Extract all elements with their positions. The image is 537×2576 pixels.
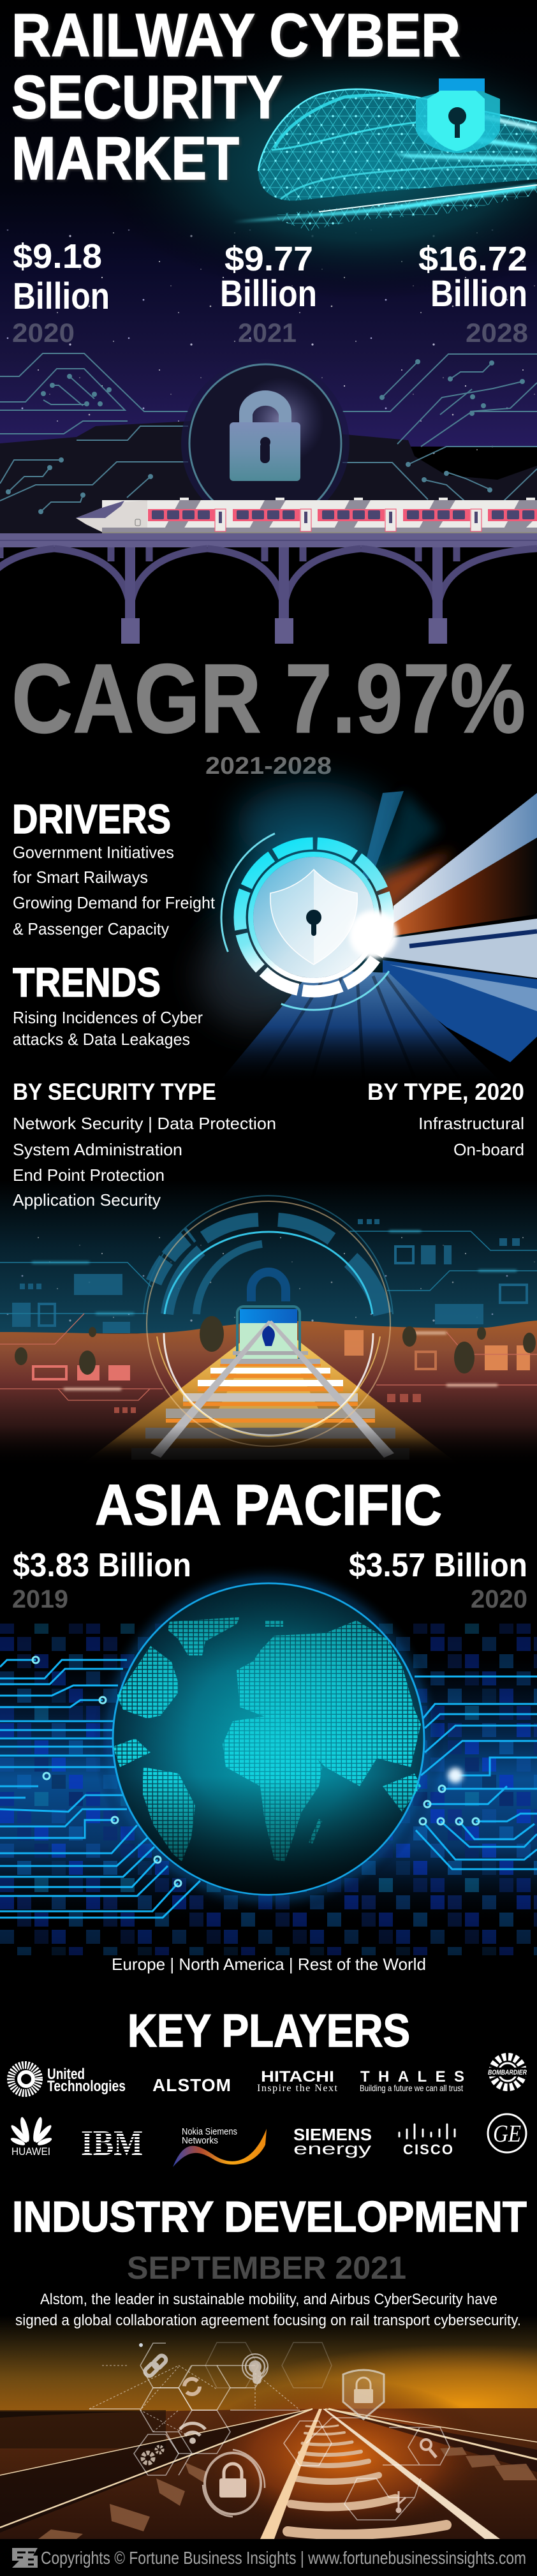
stat: 2021: $9.77 bbox=[224, 240, 313, 278]
logo: Cisco: CISCO bbox=[403, 2142, 453, 2158]
stat: Asia Pacific 2020: $3.57 Billion bbox=[349, 1547, 527, 1584]
stat: 2021: 2021 bbox=[238, 318, 297, 348]
icon: touch bbox=[242, 2354, 268, 2384]
logo: Bombardier: BOMBARDIER bbox=[488, 2069, 527, 2076]
logo: Hitachi: HITACHI bbox=[261, 2068, 334, 2085]
logo: IBM: IBM bbox=[81, 2124, 143, 2163]
icon: gears bbox=[143, 2446, 163, 2463]
logo: United Technologies bbox=[11, 2065, 126, 2095]
panel: by type 2020 bbox=[367, 1079, 524, 1159]
logo: Thales: Building a future we can all trust bbox=[360, 2083, 463, 2093]
icon: wifi bbox=[180, 2424, 205, 2444]
heading: drivers: DRIVERS bbox=[12, 796, 171, 842]
stat: 2028 bbox=[418, 240, 528, 348]
image: rail tracks at sunset with security icons bbox=[0, 2316, 537, 2539]
stat: Asia Pacific 2019 bbox=[12, 1547, 191, 1613]
logo: Huawei: HUAWEI bbox=[11, 2145, 50, 2158]
logo: Nokia Siemens Networks bbox=[173, 2126, 267, 2167]
icon: polygon mesh train with lock shield bbox=[233, 78, 537, 231]
text: industry development body: Alstom, the leader in sustainable mobility, and Airbus CyberSecurity have bbox=[40, 2291, 497, 2308]
icon: shield with keyhole bbox=[270, 870, 357, 965]
title: SECURITY bbox=[11, 63, 283, 131]
icon: padlock bbox=[237, 1272, 300, 1363]
icon: lock in rings bbox=[203, 2450, 265, 2517]
stat: Asia Pacific 2020 bbox=[349, 1547, 527, 1613]
text: types bbox=[418, 1114, 524, 1159]
stat: 2021: Billion bbox=[220, 273, 317, 315]
text: trend list bbox=[13, 1008, 203, 1049]
logo: Hitachi bbox=[257, 2068, 338, 2094]
footer bbox=[0, 2539, 537, 2576]
CAGR period: 2021-2028 bbox=[205, 753, 332, 780]
heading: trends: TRENDS bbox=[13, 959, 161, 1005]
map: dotted continents bbox=[113, 1617, 421, 1862]
text: driver list: & Passenger Capacity bbox=[13, 919, 169, 938]
icon: chain link bbox=[143, 2354, 168, 2378]
text: security types: Application Security bbox=[13, 1190, 161, 1210]
text: trend list: attacks & Data Leakages bbox=[13, 1030, 190, 1049]
icon: shield lock bbox=[343, 2370, 384, 2419]
text: driver list: for Smart Railways bbox=[13, 868, 148, 887]
text: other regions: Europe | North America | Rest of the World bbox=[112, 1955, 426, 1974]
icon: sync arrows bbox=[184, 2379, 200, 2394]
logo: Thales bbox=[360, 2068, 464, 2093]
title: RAILWAY CYBER bbox=[11, 1, 460, 70]
heading: Asia Pacific: ASIA PACIFIC bbox=[95, 1474, 442, 1537]
stat: Asia Pacific 2019: $3.83 Billion bbox=[13, 1547, 191, 1584]
text: types: On-board bbox=[453, 1140, 524, 1159]
text: driver list: Growing Demand for Freight bbox=[13, 893, 216, 912]
logo: Siemens Energy bbox=[293, 2125, 372, 2158]
text: security types: End Point Protection bbox=[13, 1166, 165, 1185]
image: globe with circuit lines bbox=[0, 1564, 537, 1955]
text: security types: System Administration bbox=[13, 1140, 182, 1159]
logo: Nokia Siemens Networks: Networks bbox=[182, 2135, 218, 2146]
text: security types: Network Security | Data Protection bbox=[13, 1114, 276, 1133]
logo: Siemens Energy: SIEMENS bbox=[293, 2125, 372, 2144]
panel: drivers bbox=[12, 796, 216, 938]
icon: usb bbox=[397, 2491, 406, 2512]
icon: rings and sleepers bbox=[131, 1201, 409, 1460]
icon: lock shield bbox=[416, 78, 500, 153]
logo: Cisco bbox=[399, 2124, 455, 2158]
heading: by type: BY TYPE, 2020 bbox=[367, 1079, 524, 1105]
panel: trends bbox=[13, 959, 203, 1049]
logo: Siemens Energy: energy bbox=[293, 2139, 371, 2158]
image: railway track through lock bbox=[0, 1180, 537, 1470]
icon: bushes bbox=[15, 1316, 536, 1375]
title: MARKET bbox=[11, 124, 239, 193]
logo: GE: GE bbox=[493, 2121, 521, 2147]
title bbox=[11, 1, 460, 193]
stat: 2021 bbox=[220, 240, 317, 348]
panel: by security type bbox=[13, 1079, 276, 1210]
stat: 2020: Billion bbox=[13, 276, 110, 317]
text: industry development body bbox=[15, 2291, 521, 2329]
logo: Huawei bbox=[10, 2116, 53, 2158]
stat: Asia Pacific 2019: 2019 bbox=[12, 1585, 68, 1613]
icon: magnifier bbox=[421, 2439, 436, 2457]
logo: United Technologies: United bbox=[47, 2066, 85, 2083]
stat: 2020: 2020 bbox=[12, 318, 75, 348]
heading: by security type: BY SECURITY TYPE bbox=[13, 1079, 216, 1105]
stat: 2028: 2028 bbox=[466, 318, 528, 348]
stat: 2028: $16.72 bbox=[418, 240, 527, 278]
logo: GE bbox=[488, 2114, 526, 2152]
date: September 2021: SEPTEMBER 2021 bbox=[127, 2250, 406, 2286]
stat: Asia Pacific 2020: 2020 bbox=[471, 1585, 527, 1613]
logo: Nokia Siemens Networks: Nokia Siemens bbox=[182, 2126, 237, 2137]
train bbox=[76, 498, 537, 533]
logo: Alstom: ALSTOM bbox=[152, 2075, 231, 2095]
image: lock ring over high-speed train bbox=[182, 775, 537, 1084]
hero background: night sky with circuit lines bbox=[0, 0, 537, 536]
logo: United Technologies: Technologies bbox=[47, 2078, 126, 2095]
logo: Thales: THALES bbox=[360, 2068, 464, 2085]
text: driver list: Government Initiatives bbox=[13, 843, 174, 862]
logo: Bombardier bbox=[486, 2057, 528, 2087]
text: driver list bbox=[13, 843, 216, 938]
logo: Hitachi: Inspire the Next bbox=[257, 2083, 338, 2094]
stat: 2020: $9.18 bbox=[13, 237, 102, 276]
heading: key players: KEY PLAYERS bbox=[128, 2006, 410, 2057]
icon: padlock in ring bbox=[181, 359, 349, 528]
text: types: Infrastructural bbox=[418, 1114, 524, 1133]
text: security types bbox=[13, 1114, 276, 1210]
text: trend list: Rising Incidences of Cyber bbox=[13, 1008, 203, 1027]
stat: 2020 bbox=[12, 237, 110, 348]
logo: Fortune Business Insights bbox=[12, 2548, 38, 2568]
bridge bbox=[0, 533, 537, 644]
